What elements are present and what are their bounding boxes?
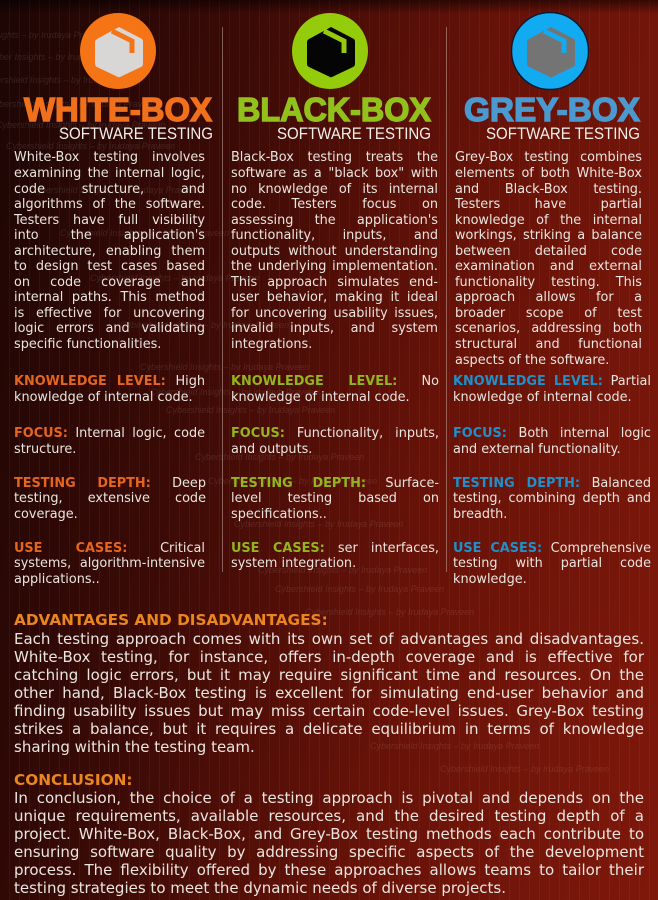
- text: grey-box description: broader scope of test: [455, 306, 642, 321]
- text: grey-box description: structural and functional: [455, 337, 642, 352]
- text: grey-box description: and Black-Box testing.: [455, 182, 642, 197]
- text: grey-box knowledge level: knowledge of internal code.: [453, 390, 632, 405]
- text: Cybershield Insights – by Irudaya Praveen: [234, 519, 403, 529]
- text: grey-box description: Testers have partial: [455, 197, 642, 212]
- text: Cybershield Insights – by Irudaya Praveen: [440, 764, 609, 774]
- text: white-box focus: structure.: [14, 442, 76, 457]
- text: black-box knowledge level: KNOWLEDGE LEVEL: No: [231, 374, 439, 389]
- text: conclusion body: unique requirements, available resources, and the desired testing depth of a: [14, 807, 644, 825]
- text: black-box description: Black-Box testing treats the: [231, 150, 438, 165]
- panel: white-box testing: [14, 13, 213, 587]
- panel: black-box testing: [230, 13, 439, 571]
- panel: advantages and disadvantages: [14, 611, 644, 756]
- text: advantages body: strikes a balance, but it requires a delicate equilibrium in terms of knowledge: [14, 720, 644, 738]
- text: grey-box description: scenarios, addressing both: [455, 321, 642, 336]
- text: black-box focus: and outputs.: [231, 442, 312, 457]
- text: white-box testing depth: coverage.: [14, 507, 78, 522]
- text: grey-box description: aspects of the software.: [455, 353, 609, 368]
- text: white-box testing depth: [14, 476, 206, 522]
- text: grey-box description: workings, striking a balance: [455, 228, 642, 243]
- text: black-box description: for uncovering usability issues,: [231, 306, 438, 321]
- text: Cybershield Insights – by Irudaya Praveen: [0, 120, 165, 130]
- text: advantages body: catching logic errors, but it may require significant time and resources. On the: [14, 666, 644, 684]
- text: grey-box description: functionality testing. This: [455, 275, 642, 290]
- text: white-box description: to design test cases based: [14, 259, 205, 274]
- text: white-box description: architecture, enabling them: [14, 244, 205, 259]
- text: grey-box testing depth: testing, combining depth and: [453, 491, 651, 506]
- text: white-box description: examining the internal logic,: [14, 166, 205, 181]
- text: black-box knowledge level: [231, 374, 439, 405]
- text: white-box description: [14, 150, 205, 352]
- text: grey-box knowledge level: [453, 374, 651, 405]
- text: Cybershield Insights – by Irudaya Praveen: [30, 185, 199, 195]
- text: grey-box testing depth: TESTING DEPTH: Balanced: [453, 476, 651, 491]
- text: Cybershield Insights – by Irudaya Praveen: [150, 387, 319, 397]
- text: white-box description: specific functionalities.: [14, 337, 161, 352]
- text: black-box description: software as a "black box" with: [231, 166, 438, 181]
- text: advantages body: finding usability issues but may miss certain code-level issues. Grey-Box testing: [14, 702, 644, 720]
- text: black-box description: invalid inputs, and system: [231, 321, 438, 336]
- text: white-box description: is effective for uncovering: [14, 306, 205, 321]
- text: grey-box description: approach allows for a: [455, 290, 642, 305]
- text: advantages body: [14, 630, 644, 756]
- text: Cybershield Insights – by Irudaya Praveen: [370, 741, 539, 751]
- text: white-box description: code structure, and: [14, 182, 205, 197]
- text: grey-box use cases: knowledge.: [453, 572, 527, 587]
- text: advantages body: sharing within the testing team.: [14, 738, 255, 756]
- text: Cybershield Insights – by Irudaya Praveen: [166, 405, 335, 415]
- text: black-box focus: [231, 426, 439, 457]
- text: grey-box description: Grey-Box testing combines: [455, 150, 642, 165]
- heading: advantages and disadvantages: ADVANTAGES AND DISADVANTAGES:: [14, 611, 328, 629]
- text: black-box testing depth: TESTING DEPTH: Surface-: [231, 476, 439, 491]
- text: white-box description: Testers have full visibility: [14, 213, 205, 228]
- text: black-box focus: FOCUS: Functionality, inputs,: [231, 426, 439, 441]
- text: conclusion body: testing strategies to meet the dynamic needs of diverse projects.: [14, 879, 506, 897]
- subheading: grey-box: SOFTWARE TESTING: [486, 125, 640, 143]
- text: black-box use cases: USE CASES: ser interfaces,: [231, 541, 439, 556]
- subheading: white-box: SOFTWARE TESTING: [59, 125, 213, 143]
- icon: green circle with black box: [292, 13, 368, 89]
- text: grey-box description: between detailed code: [455, 244, 642, 259]
- text: white-box focus: [14, 426, 205, 457]
- text: grey-box description: elements of both White-Box: [455, 166, 642, 181]
- text: grey-box use cases: testing with partial code: [453, 556, 651, 571]
- heading: conclusion: CONCLUSION:: [14, 771, 133, 789]
- icon: orange circle with white box: [80, 13, 156, 89]
- text: Cybershield Insights – by Irudaya Praveen: [90, 273, 259, 283]
- text: grey-box use cases: USE CASES: Comprehensive: [453, 541, 651, 556]
- text: white-box focus: FOCUS: Internal logic, code: [14, 426, 205, 441]
- text: black-box description: outputs without understanding: [231, 244, 438, 259]
- text: black-box knowledge level: knowledge of internal code.: [231, 390, 410, 405]
- text: white-box use cases: systems, algorithm-intensive: [14, 556, 205, 571]
- text: black-box use cases: system integration.: [231, 556, 356, 571]
- panel: conclusion: [14, 771, 644, 897]
- text: white-box description: internal paths. This method: [14, 290, 205, 305]
- text: grey-box description: knowledge of the internal: [455, 213, 642, 228]
- text: Cybershield Insights – by Irudaya Praveen: [275, 584, 444, 594]
- text: black-box testing depth: specifications..: [231, 507, 327, 522]
- text: Cybershield Insights – by Irudaya Praveen: [208, 476, 377, 486]
- text: Cybershield Insights – by Irudaya Praveen: [140, 362, 309, 372]
- text: white-box description: on code coverage and: [14, 275, 205, 290]
- text: white-box description: algorithms of the software.: [14, 197, 205, 212]
- text: white-box knowledge level: knowledge of internal code.: [14, 390, 193, 405]
- text: black-box description: assessing the application's: [231, 213, 438, 228]
- text: advantages body: other hand, Black-Box testing is excellent for simulating end-user behavior and: [14, 684, 644, 702]
- text: grey-box testing depth: [453, 476, 651, 522]
- text: conclusion body: project. White-Box, Black-Box, and Grey-Box testing methods each contribute to: [14, 825, 644, 843]
- text: white-box description: logic errors and validating: [14, 321, 205, 336]
- text: grey-box use cases: [453, 541, 651, 587]
- text: white-box use cases: applications..: [14, 572, 100, 587]
- text: white-box use cases: [14, 541, 205, 587]
- text: black-box testing depth: [231, 476, 439, 522]
- text: grey-box description: examination and external: [455, 259, 642, 274]
- text: Cybershield Insights – by Irudaya Praveen: [120, 320, 289, 330]
- text: Cybershield Insights – by Irudaya Praveen: [60, 228, 229, 238]
- text: black-box description: the underlying implementation.: [231, 259, 438, 274]
- text: black-box description: functionality, inputs, and: [231, 228, 438, 243]
- text: grey-box knowledge level: KNOWLEDGE LEVEL: Partial: [453, 374, 651, 389]
- text: grey-box focus: FOCUS: Both internal logic: [453, 426, 651, 441]
- text: white-box knowledge level: [14, 374, 205, 405]
- text: grey-box focus: [453, 426, 651, 457]
- subheading: black-box: SOFTWARE TESTING: [277, 125, 431, 143]
- text: grey-box testing depth: breadth.: [453, 507, 507, 522]
- text: white-box testing depth: TESTING DEPTH: Deep: [14, 476, 206, 491]
- text: grey-box description: [454, 150, 642, 368]
- text: advantages body: White-Box testing, for instance, offers in-depth coverage and is effective for: [14, 648, 644, 666]
- text: black-box description: This approach simulates end-: [231, 275, 438, 290]
- text: grey-box focus: and external functionality.: [453, 442, 621, 457]
- text: Cybershield Insights – by Irudaya Praveen: [6, 141, 175, 151]
- text: white-box use cases: USE CASES: Critical: [14, 541, 205, 556]
- text: black-box description: user behavior, making it ideal: [231, 290, 438, 305]
- text: conclusion body: process. The flexibility offered by these approaches allows teams to tailor their: [14, 861, 644, 879]
- text: black-box description: no knowledge of its internal: [231, 182, 438, 197]
- text: black-box testing depth: level testing based on: [231, 491, 439, 506]
- text: conclusion body: In conclusion, the choice of a testing approach is pivotal and depends on the: [14, 789, 644, 807]
- text: advantages body: Each testing approach comes with its own set of advantages and disadvantages.: [14, 630, 644, 648]
- text: black-box description: [230, 150, 438, 352]
- text: white-box description: into the application's: [14, 228, 205, 243]
- text: Cybershield Insights – by Irudaya Praveen: [258, 565, 427, 575]
- text: white-box knowledge level: KNOWLEDGE LEVEL: High: [14, 374, 205, 389]
- text: conclusion body: [14, 789, 644, 897]
- icon: blue circle with grey box: [510, 12, 590, 90]
- text: white-box testing depth: testing, extensive code: [14, 491, 206, 506]
- text: Cybershield Insights – by Irudaya Praveen: [195, 452, 364, 462]
- text: black-box description: code. Testers focus on: [231, 197, 438, 212]
- text: black-box use cases: [231, 541, 439, 571]
- panel: grey-box testing: [453, 12, 651, 587]
- text: conclusion body: ensuring software quality by addressing specific aspects of the development: [14, 843, 644, 861]
- text: white-box description: White-Box testing involves: [14, 150, 205, 165]
- text: Cybershield Insights – by Irudaya Praveen: [305, 607, 474, 617]
- text: black-box description: integrations.: [231, 337, 312, 352]
